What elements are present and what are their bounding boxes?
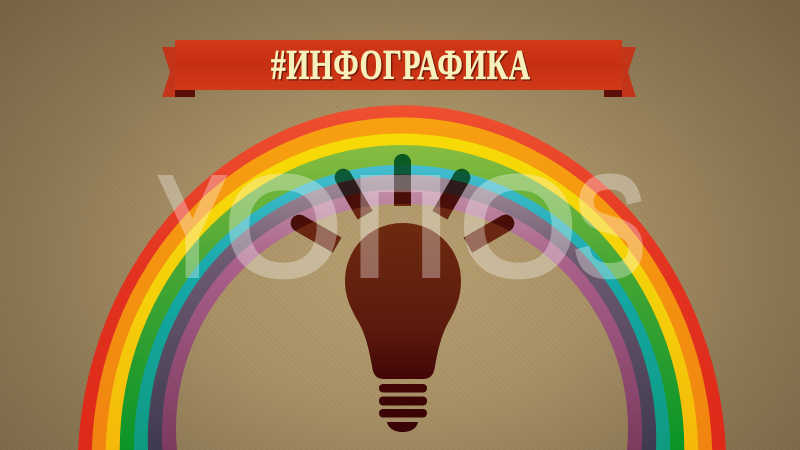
banner title: #ИНФОГРАФИКА xyxy=(271,42,530,88)
bulb screw base xyxy=(379,384,427,432)
bulb glass xyxy=(345,223,461,379)
watermark xyxy=(159,147,645,305)
ribbon banner xyxy=(162,40,636,97)
icon: light bulb rays xyxy=(290,154,514,252)
watermark: П xyxy=(353,147,448,305)
watermark: Y xyxy=(159,147,226,305)
ribbon folds xyxy=(175,90,622,97)
rainbow arc xyxy=(78,105,726,450)
left ribbon tail xyxy=(162,47,195,97)
ribbon body xyxy=(175,40,622,90)
right ribbon tail xyxy=(604,47,636,97)
icon: light bulb xyxy=(345,223,461,432)
watermark: O xyxy=(460,147,576,305)
watermark: S xyxy=(573,147,645,305)
banner title: #ИНФОГРАФИКА xyxy=(272,43,531,90)
watermark: O xyxy=(225,147,341,305)
